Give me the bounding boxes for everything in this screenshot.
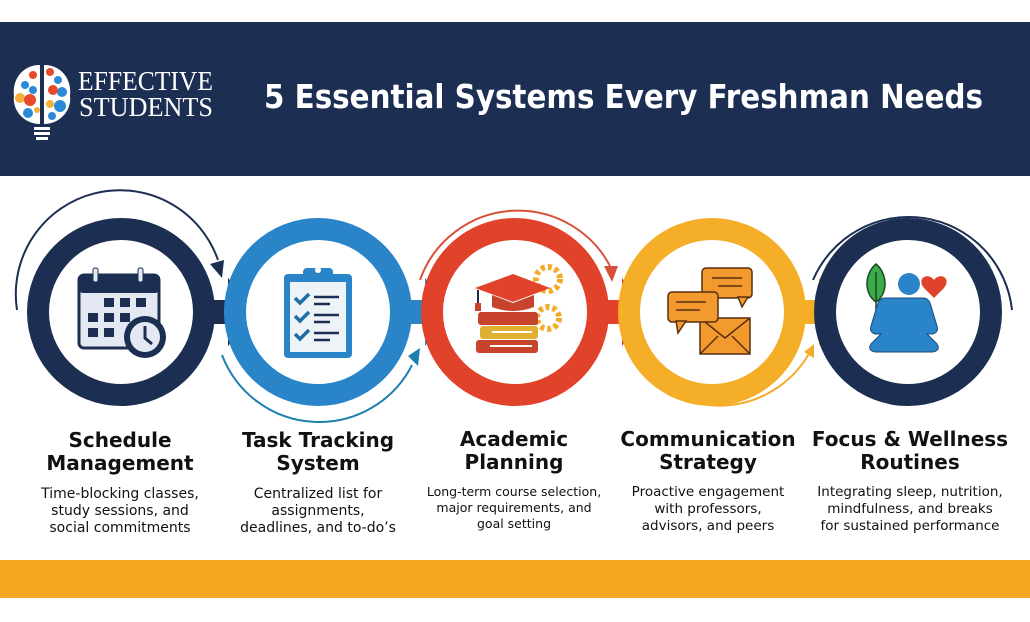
text: column 4: Communication <box>620 427 796 451</box>
text: column 1: study sessions, and <box>51 503 189 519</box>
circle 1: schedule <box>38 229 258 395</box>
text: column 2: Task Tracking <box>242 428 394 452</box>
text: column 4 <box>620 427 796 534</box>
circle 5: focus & wellness <box>825 229 991 395</box>
flow arrows (thin curved) <box>16 190 1012 422</box>
circle 3: academic planning <box>432 229 652 395</box>
text: column 2: assignments, <box>271 503 365 519</box>
text: column 5: Focus & Wellness <box>812 427 1008 451</box>
text: column 3: Planning <box>465 450 563 474</box>
footer band <box>0 560 1030 598</box>
text: column 2: deadlines, and to-do’s <box>240 520 396 536</box>
text: column 3: Academic <box>460 427 568 451</box>
text: column 5: Integrating sleep, nutrition, <box>817 484 1003 500</box>
text: column 3: goal setting <box>477 516 551 531</box>
text: column 5: Routines <box>860 450 960 474</box>
text: column 5 <box>812 427 1008 534</box>
logo text: EFFECTIVE <box>78 66 213 96</box>
text: column 3: major requirements, and <box>436 500 592 515</box>
icon: chat bubbles and envelope <box>668 268 752 354</box>
circle 4: communication <box>629 229 849 395</box>
text: column 2: Centralized list for <box>254 486 382 502</box>
logo text <box>78 66 213 122</box>
logo text: STUDENTS <box>79 92 213 122</box>
text: column 1: social commitments <box>49 520 191 536</box>
text: column 1: Management <box>46 451 194 475</box>
text: column 1 <box>40 428 199 536</box>
icon: calendar <box>79 268 166 358</box>
circle 2: task tracking <box>235 229 455 395</box>
text: column 4: with professors, <box>654 501 762 517</box>
text: column 4: Strategy <box>659 450 757 474</box>
icon: clipboard <box>284 267 352 358</box>
text: column 1: Time-blocking classes, <box>40 486 199 502</box>
header band <box>0 22 1030 176</box>
text: column 3: Long-term course selection, <box>427 484 601 499</box>
logo: brain bulb <box>14 65 70 140</box>
text: column 3 <box>427 427 601 531</box>
text: column 4: Proactive engagement <box>632 484 784 500</box>
icon: meditation <box>867 264 947 352</box>
text: column 2 <box>240 428 396 536</box>
text: column 1: Schedule <box>68 428 172 452</box>
text: column 5: for sustained performance <box>821 518 999 534</box>
text: column 2: System <box>276 451 360 475</box>
text: column 4: advisors, and peers <box>642 518 774 534</box>
icon: cap, books, gears <box>475 267 560 353</box>
text: column 5: mindfulness, and breaks <box>827 501 993 517</box>
